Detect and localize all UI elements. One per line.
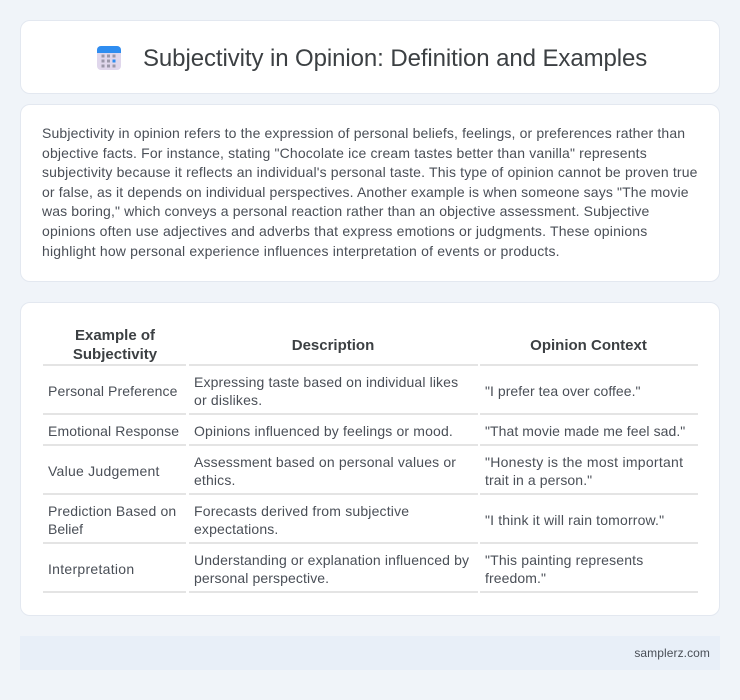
row: personal preference: "I prefer tea over coffee." [485,383,641,399]
header card [20,20,720,94]
column heading: example [73,327,157,363]
row: value judgement: trait in a person." [485,472,592,488]
row: prediction based on belief: Prediction Based on [48,503,176,519]
footer bar [20,636,720,670]
intro text: was boring," which conveys a personal reaction rather than an objective assessment. Subjective [42,203,649,219]
row: prediction based on belief: Belief [48,521,83,537]
intro text: opinions often use adjectives and adverbs that express emotions or judgments. These opinions [42,223,647,239]
row: emotional response [48,423,685,439]
intro text: or false, as it depends on individual perspectives. Another example is when someone says "The movie [42,184,689,200]
row: personal preference [48,374,641,408]
row: value judgement: Assessment based on personal values or [194,454,456,470]
row: interpretation: Understanding or explanation influenced by [194,552,469,568]
row: interpretation: Interpretation [48,561,134,577]
intro text: subjectivity because it reflects an individual's personal taste. This type of opinion cannot be proven true [42,164,698,180]
row: emotional response: "That movie made me feel sad." [485,423,685,439]
row: interpretation: "This painting represents [485,552,643,568]
row: interpretation: freedom." [485,570,546,586]
table card [20,302,720,616]
column heading: description: Description [292,337,374,354]
row: emotional response: Opinions influenced by feelings or mood. [194,423,453,439]
column heading: example: Subjectivity [73,346,157,363]
intro text: highlight how personal experience influences interpretation of events or products. [42,243,560,259]
row: personal preference: Expressing taste based on individual likes [194,374,458,390]
row: interpretation [48,552,643,586]
intro paragraph card [20,104,720,282]
row: value judgement: ethics. [194,472,236,488]
column heading: opinion context: Opinion Context [530,337,647,354]
row: value judgement [48,454,683,488]
row: prediction based on belief: Forecasts derived from subjective [194,503,409,519]
row: prediction based on belief: expectations. [194,521,278,537]
row: interpretation: personal perspective. [194,570,329,586]
row: value judgement: Value Judgement [48,463,160,479]
intro text: objective facts. For instance, stating "Chocolate ice cream tastes better than vanilla" represents [42,145,647,161]
row: value judgement: "Honesty is the most important [485,454,683,470]
row: personal preference: or dislikes. [194,392,262,408]
intro text [42,125,698,259]
column heading: example: Example of [75,327,155,344]
footer source text: samplerz.com [634,646,710,660]
table header [73,327,647,363]
row: prediction based on belief [48,503,664,537]
title: Subjectivity in Opinion: Definition and Examples [143,45,647,72]
row: emotional response: Emotional Response [48,423,179,439]
row: prediction based on belief: "I think it will rain tomorrow." [485,512,664,528]
row: personal preference: Personal Preference [48,383,178,399]
icon: calendar [97,46,121,70]
intro text: Subjectivity in opinion refers to the expression of personal beliefs, feelings, or preferences rather than [42,125,685,141]
